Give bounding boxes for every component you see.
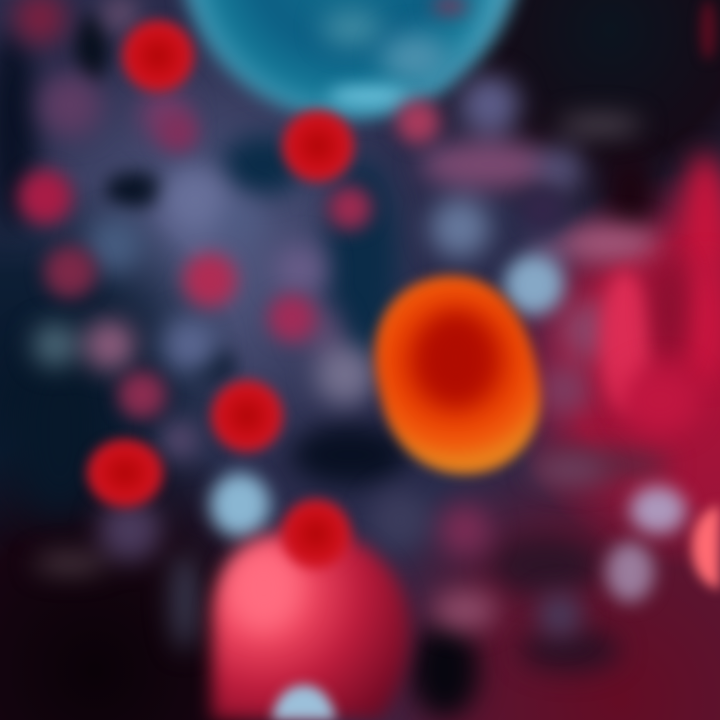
red glow on the right — [599, 0, 720, 434]
orange cell — [375, 276, 540, 474]
pink-red cells — [18, 100, 440, 419]
small lavender cell — [606, 542, 654, 602]
red blood cell 3 — [211, 380, 283, 452]
large teal sphere — [180, 0, 522, 120]
pale blue cell at bottom edge — [272, 685, 336, 720]
red blood cell 1 — [122, 20, 194, 92]
large pink sphere — [212, 530, 410, 720]
red blood cell 2 — [282, 110, 354, 182]
bright coral cell at right edge — [692, 505, 720, 590]
pale lavender cell at lower right — [630, 486, 686, 534]
dark hollow near centre right — [521, 190, 565, 230]
red blood cell 4 — [87, 439, 163, 507]
red blood cell 5 — [281, 499, 351, 569]
pale blue cell beside orange cell — [504, 255, 564, 315]
pale blue cell left of centre — [210, 473, 270, 537]
